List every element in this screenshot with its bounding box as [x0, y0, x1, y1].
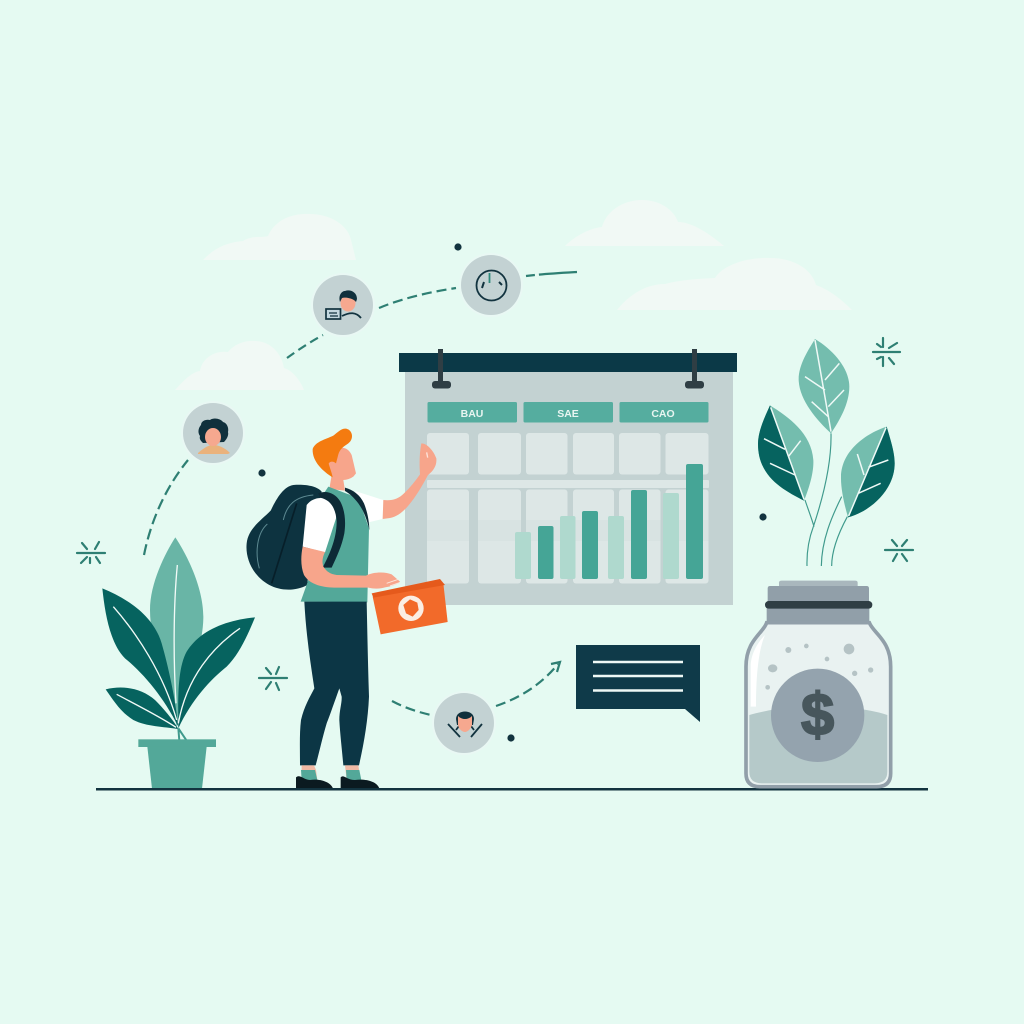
ground line [96, 788, 928, 790]
dollar coin: $ [801, 680, 834, 747]
avatar: woman with dark hair [432, 691, 496, 755]
orange box [372, 579, 448, 634]
jar bubbles [765, 644, 873, 690]
column label: BAU: BAU [461, 408, 483, 420]
person [246, 429, 448, 788]
cloud: mid left [175, 341, 304, 390]
column label: BAU [428, 402, 517, 422]
dashed path: fourth arc [526, 272, 577, 276]
left leaf [758, 405, 813, 501]
cloud: top right [617, 258, 852, 310]
cloud: top centre [565, 200, 724, 246]
column label: SAE [524, 402, 613, 422]
avatar: clock gauge [459, 253, 523, 317]
leaf veins [113, 565, 240, 727]
avatar: woman with curly hair [181, 401, 245, 465]
sparkle: far left [77, 542, 105, 563]
socks [301, 765, 361, 780]
dot: right [759, 513, 767, 521]
right leaf [841, 427, 895, 517]
hair [313, 429, 352, 477]
top leaf [799, 339, 849, 433]
calendar pin: left [432, 349, 451, 388]
column label: CAO [620, 402, 708, 422]
dot: left [258, 469, 266, 477]
calendar header bar [399, 353, 737, 372]
jar highlight [751, 635, 765, 707]
shirt sleeve: near arm [303, 498, 336, 552]
jar liquid [749, 706, 887, 783]
pot [138, 739, 216, 789]
shirt sleeve: raised arm [355, 491, 383, 522]
jar lid top [779, 581, 858, 587]
dashed path: lower left [392, 701, 431, 715]
stem [178, 728, 187, 741]
vest [301, 487, 369, 602]
leaf veins [764, 340, 888, 516]
neck and face [327, 448, 356, 491]
left leaf [102, 588, 178, 727]
trousers [300, 602, 369, 765]
dashed path: left arc [144, 460, 188, 555]
jar lid [768, 586, 869, 602]
dollar coin [771, 669, 864, 762]
shoes [296, 776, 379, 788]
backpack straps [318, 488, 369, 568]
jar neck [767, 607, 869, 623]
hand fingers on box [387, 579, 399, 586]
raised arm [383, 443, 436, 519]
avatar: man with screen [311, 273, 375, 337]
calendar body [405, 372, 733, 605]
dashed arrow: lower right [496, 662, 560, 706]
dot: bottom [507, 734, 515, 742]
speech bubble [576, 645, 700, 722]
dashed path: second arc [287, 335, 323, 358]
back leaf [150, 537, 203, 727]
jar band [765, 601, 872, 609]
dashed path: third arc [379, 288, 456, 308]
sparkle: top right [873, 338, 900, 366]
calendar pin: right [685, 349, 704, 388]
near arm [301, 547, 400, 589]
jar plant [758, 339, 895, 566]
calendar row shading [427, 520, 708, 541]
bar chart [515, 464, 703, 579]
calendar cells [427, 433, 709, 584]
cloud: top left [203, 214, 356, 260]
stems [805, 433, 847, 566]
lower left leaf [106, 688, 178, 729]
dot: top [454, 243, 462, 251]
sparkle: mid left [259, 667, 287, 690]
sparkle: lower right [885, 540, 913, 561]
jar glass [746, 623, 891, 787]
left potted plant [102, 537, 255, 789]
right leaf [178, 617, 255, 728]
hand highlight on raised palm [427, 452, 428, 458]
backpack [246, 485, 322, 590]
money jar [746, 581, 891, 787]
column label: CAO: CAO [651, 408, 675, 420]
calendar [399, 349, 737, 605]
column label: SAE: SAE [557, 408, 579, 420]
